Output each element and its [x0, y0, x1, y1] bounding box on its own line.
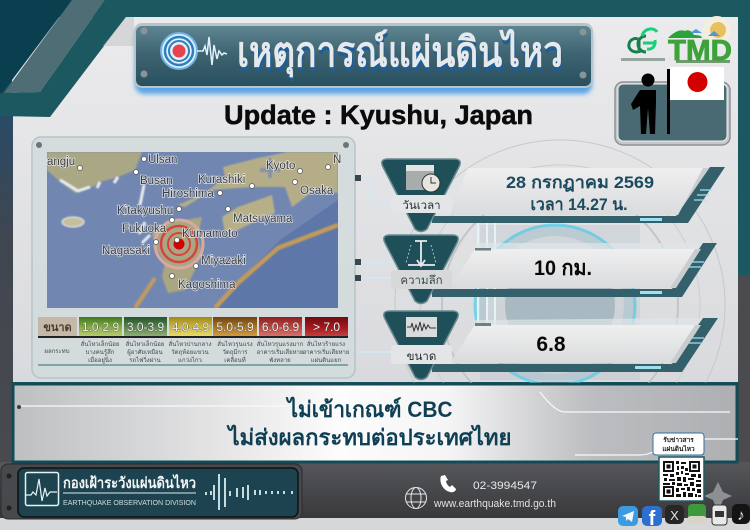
connector lines: [355, 175, 393, 352]
banner text: [226, 396, 512, 450]
legend descriptions: สั่นไหวปานกลาง: [168, 340, 212, 348]
depth value: 10 กม.: [534, 257, 592, 280]
icon shield: date: วันเวลา: [402, 200, 441, 212]
map: [47, 152, 341, 308]
quake epicentre rings: [155, 220, 203, 268]
map place labels: Ulsan: [148, 154, 177, 166]
map place labels: [47, 154, 341, 291]
magnitude legend: 4.0-4.9: [172, 320, 210, 334]
legend descriptions: เคลื่อนที่: [224, 356, 246, 364]
concentric background circles: [395, 140, 725, 470]
icon shield: depth: [384, 235, 458, 304]
magnitude legend: 5.0-5.9: [216, 320, 254, 334]
legend descriptions: อาคารเริ่มเสียหาย: [257, 348, 303, 356]
map place markers: [78, 156, 330, 278]
map place labels: Osaka: [300, 185, 334, 197]
panel: map and magnitude legend: [32, 137, 355, 378]
legend descriptions: เมื่ออยู่นิ่ง: [88, 356, 112, 364]
QR label: แผ่นดินไหว: [662, 444, 695, 453]
map place labels: Kagoshima: [178, 279, 236, 291]
legend descriptions: สั่นไหวรุนแรงมาก: [257, 340, 304, 348]
legend descriptions: วัตถุห้อยแขวน: [171, 349, 209, 356]
icon shield: magnitude: [384, 311, 458, 380]
legend descriptions: สั่นไหวรุนแรง: [217, 340, 253, 348]
map place labels: Kyoto: [266, 160, 295, 172]
icon: person holding Japan flag: [615, 67, 730, 145]
legend descriptions: อาคารเริ่มเสียหาย: [303, 348, 349, 356]
magnitude legend: ขนาด: [43, 322, 72, 334]
division name: กองเฝ้าระวังแผ่นดินไหว: [63, 473, 196, 492]
icon shield: magnitude: ขนาด: [407, 351, 436, 363]
map place labels: Fukuoka: [122, 223, 167, 235]
QR label: [653, 433, 704, 455]
logo: TMD: TMD: [668, 35, 732, 67]
legend descriptions: วัตถุมีการ: [222, 348, 248, 356]
QR code block: [653, 433, 704, 501]
corner chevron decoration: [0, 0, 750, 117]
QR code: [659, 457, 704, 501]
info row: depth: [384, 235, 717, 304]
map place labels: Kitakyushu: [117, 205, 173, 217]
icon: facebook: f: [649, 508, 656, 530]
icon: phone app: [712, 505, 727, 525]
date value: 28 กรกฎาคม 2569: [506, 173, 654, 192]
map place labels: Nagasaki: [102, 245, 150, 257]
map place labels: Kumamoto: [182, 228, 238, 240]
legend descriptions: พังทลาย: [269, 357, 291, 364]
legend descriptions: แกว่งไกว: [178, 356, 202, 364]
legend descriptions: สั่นไหวร้ายแรง: [307, 340, 345, 348]
legend descriptions: สั่นไหวเล็กน้อย: [126, 339, 164, 348]
icon: line app: [687, 504, 707, 524]
map place labels: Hiroshima: [162, 188, 214, 200]
title text: เหตุการณ์แผ่นดินไหว: [238, 32, 564, 82]
magnitude legend: 3.0-3.9: [127, 320, 165, 334]
social icons: [618, 504, 750, 530]
footer bar: [0, 462, 750, 518]
map place labels: Busan: [140, 175, 173, 187]
waveform: [206, 474, 292, 510]
legend descriptions: ผู้อาศัยเหมือน: [127, 348, 163, 356]
contact details: www.earthquake.tmd.go.th: [433, 498, 556, 510]
magnitude legend: > 7.0: [313, 320, 340, 334]
banner: CBC notice: [13, 384, 738, 462]
magnitude value: 6.8: [536, 333, 566, 356]
star decoration icon: [704, 482, 732, 512]
panel: observation division plate: EARTHQUAKE OBSERVATION DIVISION: [63, 498, 196, 507]
legend descriptions: แผ่นดินแยก: [311, 357, 342, 364]
info row: magnitude: [384, 311, 718, 380]
legend descriptions: [44, 339, 349, 364]
icon: seismic target: [161, 33, 227, 69]
contact details: 02-3994547: [473, 480, 537, 492]
legend descriptions: รถไฟวิ่งผ่าน: [129, 356, 161, 364]
title text: เหตุการณ์แผ่นดินไหว: [237, 28, 563, 78]
map place labels: Miyazaki: [201, 255, 246, 267]
map place labels: angju: [47, 156, 75, 168]
map place labels: Kurashiki: [198, 174, 245, 186]
map place labels: N: [333, 154, 341, 166]
date value: เวลา 14.27 น.: [530, 195, 628, 214]
magnitude legend: [38, 317, 349, 366]
subtitle: update location: Update : Kyushu, Japan: [224, 100, 533, 130]
legend descriptions: ผลกระทบ: [44, 348, 70, 355]
title plate: [134, 23, 593, 94]
icon: tiktok: ♪: [737, 507, 745, 524]
icon: phone: [440, 475, 456, 492]
logo: TMD: [668, 16, 732, 67]
icon: globe: [406, 488, 426, 508]
icon: X: X: [670, 508, 679, 523]
magnitude legend: 6.0-6.9: [262, 320, 300, 334]
icon shield: depth: ความลึก: [400, 274, 443, 287]
panel: observation division plate: [1, 464, 302, 519]
banner text: ไม่ส่งผลกระทบต่อประเทศไทย: [226, 424, 512, 450]
banner text: ไม่เข้าเกณฑ์ CBC: [286, 396, 453, 422]
info row: date and time: [382, 159, 725, 232]
magnitude legend: 1.0-2.9: [82, 320, 120, 334]
icon shield: date: [382, 159, 460, 232]
icon: telegram: [618, 506, 638, 526]
legend descriptions: สั่นไหวเล็กน้อย: [81, 339, 119, 348]
QR label: รับข่าวสาร: [663, 436, 694, 444]
date value: [506, 173, 654, 214]
legend descriptions: บางคนรู้สึก: [86, 349, 115, 356]
contact details: [406, 475, 556, 510]
icon: seismograph: [26, 472, 58, 506]
logo: DG: [621, 29, 665, 61]
map place labels: Matsuyama: [233, 213, 293, 225]
